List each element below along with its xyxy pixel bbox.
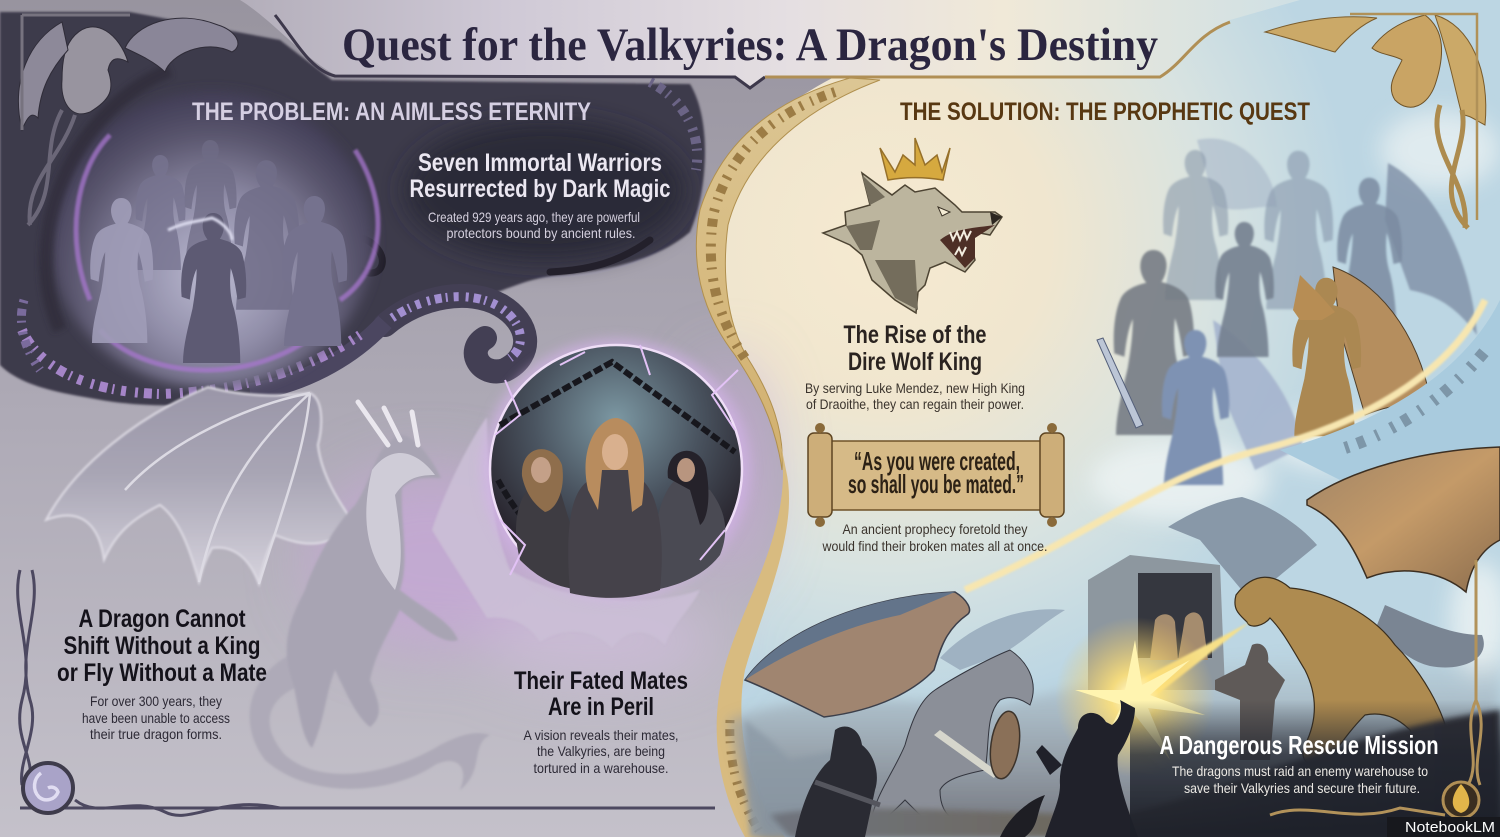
notebooklm mark: NotebookLM xyxy=(1405,819,1495,836)
rune marks: left arc xyxy=(21,300,40,370)
text block: dire wolf king: By serving Luke Mendez, new High King xyxy=(805,380,1025,396)
text block: a dragon cannot: have been unable to access xyxy=(82,710,230,726)
panel: dark swirl background xyxy=(0,12,705,405)
left enemy xyxy=(795,726,877,837)
dragon body xyxy=(1372,15,1442,107)
text block: prophecy caption: would find their broken mates all at once. xyxy=(822,538,1048,554)
wing left xyxy=(1265,17,1377,52)
dragon body xyxy=(287,435,458,748)
figures: women xyxy=(516,418,725,598)
background hills xyxy=(745,720,840,837)
purple haze behind dragon xyxy=(310,360,765,680)
text block: fated mates: Their Fated Mates xyxy=(514,667,688,695)
arrow: golden magic trail xyxy=(965,300,1485,590)
heading: the problem: THE PROBLEM: AN AIMLESS ETERNITY xyxy=(192,98,591,126)
panel: blue rune band xyxy=(1280,300,1500,480)
scroll: prophecy xyxy=(808,423,1064,527)
warehouse xyxy=(1088,555,1225,690)
beam of fire xyxy=(1120,622,1250,708)
rune marks: gold xyxy=(711,92,835,358)
enemy warrior right xyxy=(1215,644,1285,760)
icon: dire wolf head xyxy=(823,173,1002,313)
wing right xyxy=(125,18,238,72)
scroll: prophecy: so shall you be mated.” xyxy=(848,469,1024,499)
panel: clouds xyxy=(1090,110,1500,680)
left knotwork frame xyxy=(18,570,715,815)
notebooklm mark xyxy=(1387,817,1500,837)
burst xyxy=(1055,617,1215,777)
panel: warriors portal xyxy=(46,70,378,388)
enemy silhouette xyxy=(1036,700,1138,837)
left dragon wing xyxy=(745,592,969,717)
icon: gold corner dragon xyxy=(1265,14,1486,228)
dragon body xyxy=(62,27,128,114)
shield xyxy=(986,709,1024,781)
text block: a dragon cannot: or Fly Without a Mate xyxy=(57,659,267,687)
sword xyxy=(1097,338,1143,428)
dragon wing xyxy=(46,387,355,584)
text block: a dragon cannot: Shift Without a King xyxy=(64,632,260,660)
warriors: ghost figures xyxy=(90,140,347,363)
text block: rescue mission: The dragons must raid an enemy warehouse to xyxy=(1172,763,1428,779)
panel: battle scene xyxy=(728,447,1500,837)
text block: seven immortal warriors: Created 929 years ago, they are powerful xyxy=(428,209,640,225)
wing right xyxy=(1435,15,1486,125)
text block: dire wolf king xyxy=(805,321,1025,412)
scroll text: “As you were created, xyxy=(854,446,1020,476)
text block: fated mates xyxy=(514,667,688,776)
panel: rescue caption shade xyxy=(1130,700,1500,837)
icon: dire wolf crown xyxy=(880,138,950,180)
title text: Quest for the Valkyries: A Dragon's Destiny xyxy=(342,19,1158,71)
text block: rescue mission: save their Valkyries and secure their future. xyxy=(1184,780,1420,796)
mouth xyxy=(940,225,995,268)
debris xyxy=(1000,795,1045,837)
dragon tail grey xyxy=(1375,605,1484,668)
heading: the solution: THE SOLUTION: THE PROPHETIC QUEST xyxy=(900,98,1310,126)
sword xyxy=(934,730,998,778)
dragon tail xyxy=(250,650,490,790)
text block: seven immortal warriors xyxy=(410,149,671,241)
rune marks: gold lower xyxy=(730,720,762,835)
text block: seven immortal warriors: protectors bound by ancient rules. xyxy=(446,225,636,241)
text block: dire wolf king: Dire Wolf King xyxy=(848,348,982,376)
text block: a dragon cannot: A Dragon Cannot xyxy=(78,605,246,633)
gold rune band xyxy=(696,78,880,837)
left dragon armored xyxy=(870,650,1033,825)
icon: dark corner dragon xyxy=(18,15,238,225)
text block: a dragon cannot xyxy=(57,605,267,742)
text block: rescue mission xyxy=(1160,730,1438,796)
text block: prophecy caption xyxy=(822,521,1048,554)
text block: a dragon cannot: their true dragon forms. xyxy=(90,726,222,742)
gold dragon wing xyxy=(1307,447,1500,592)
corner emblem spiral xyxy=(23,763,73,813)
text block: fated mates: Are in Peril xyxy=(548,693,654,721)
rune marks: swirl arm xyxy=(392,297,520,358)
text block: prophecy caption: An ancient prophecy foretold they xyxy=(842,521,1028,537)
text block: fated mates: tortured in a warehouse. xyxy=(534,760,668,776)
text shade xyxy=(405,120,685,260)
ghost wings xyxy=(1197,138,1477,470)
text block: dire wolf king: of Draoithe, they can regain their power. xyxy=(806,396,1024,412)
title banner xyxy=(240,0,1300,88)
circle: Valkyries in chains xyxy=(482,339,750,599)
text block: seven immortal warriors: Seven Immortal Warriors xyxy=(418,149,662,177)
knot xyxy=(1437,105,1468,228)
text block: dire wolf king: The Rise of the xyxy=(844,321,987,349)
icon: ghost dragon far wing xyxy=(432,417,700,648)
rune marks: upper right arc xyxy=(650,82,697,170)
icon: golden dragon warrior xyxy=(1292,267,1433,436)
ground haze xyxy=(728,648,1500,837)
dark swirl arm xyxy=(385,296,525,371)
back dragon wing xyxy=(1168,497,1317,600)
background: right panel xyxy=(711,0,1500,837)
gold line lower xyxy=(717,440,789,837)
text block: a dragon cannot: For over 300 years, they xyxy=(90,693,222,709)
wing left xyxy=(18,22,68,130)
right knotwork frame xyxy=(1270,560,1481,815)
text block: seven immortal warriors: Resurrected by Dark Magic xyxy=(410,175,671,203)
ground xyxy=(770,710,1500,837)
text block: fated mates: A vision reveals their mates, xyxy=(524,727,678,743)
icon: corner emblem gold xyxy=(1443,782,1479,818)
icon: ghost dragon xyxy=(46,387,490,790)
panel: right ghost warriors xyxy=(1097,138,1477,485)
fur shading xyxy=(846,175,918,310)
text block: fated mates: the Valkyries, are being xyxy=(537,743,665,759)
rune marks: lower band xyxy=(22,330,360,394)
knot xyxy=(28,110,75,225)
rune marks: blue band xyxy=(1345,345,1490,448)
gold dragon xyxy=(1235,577,1450,767)
